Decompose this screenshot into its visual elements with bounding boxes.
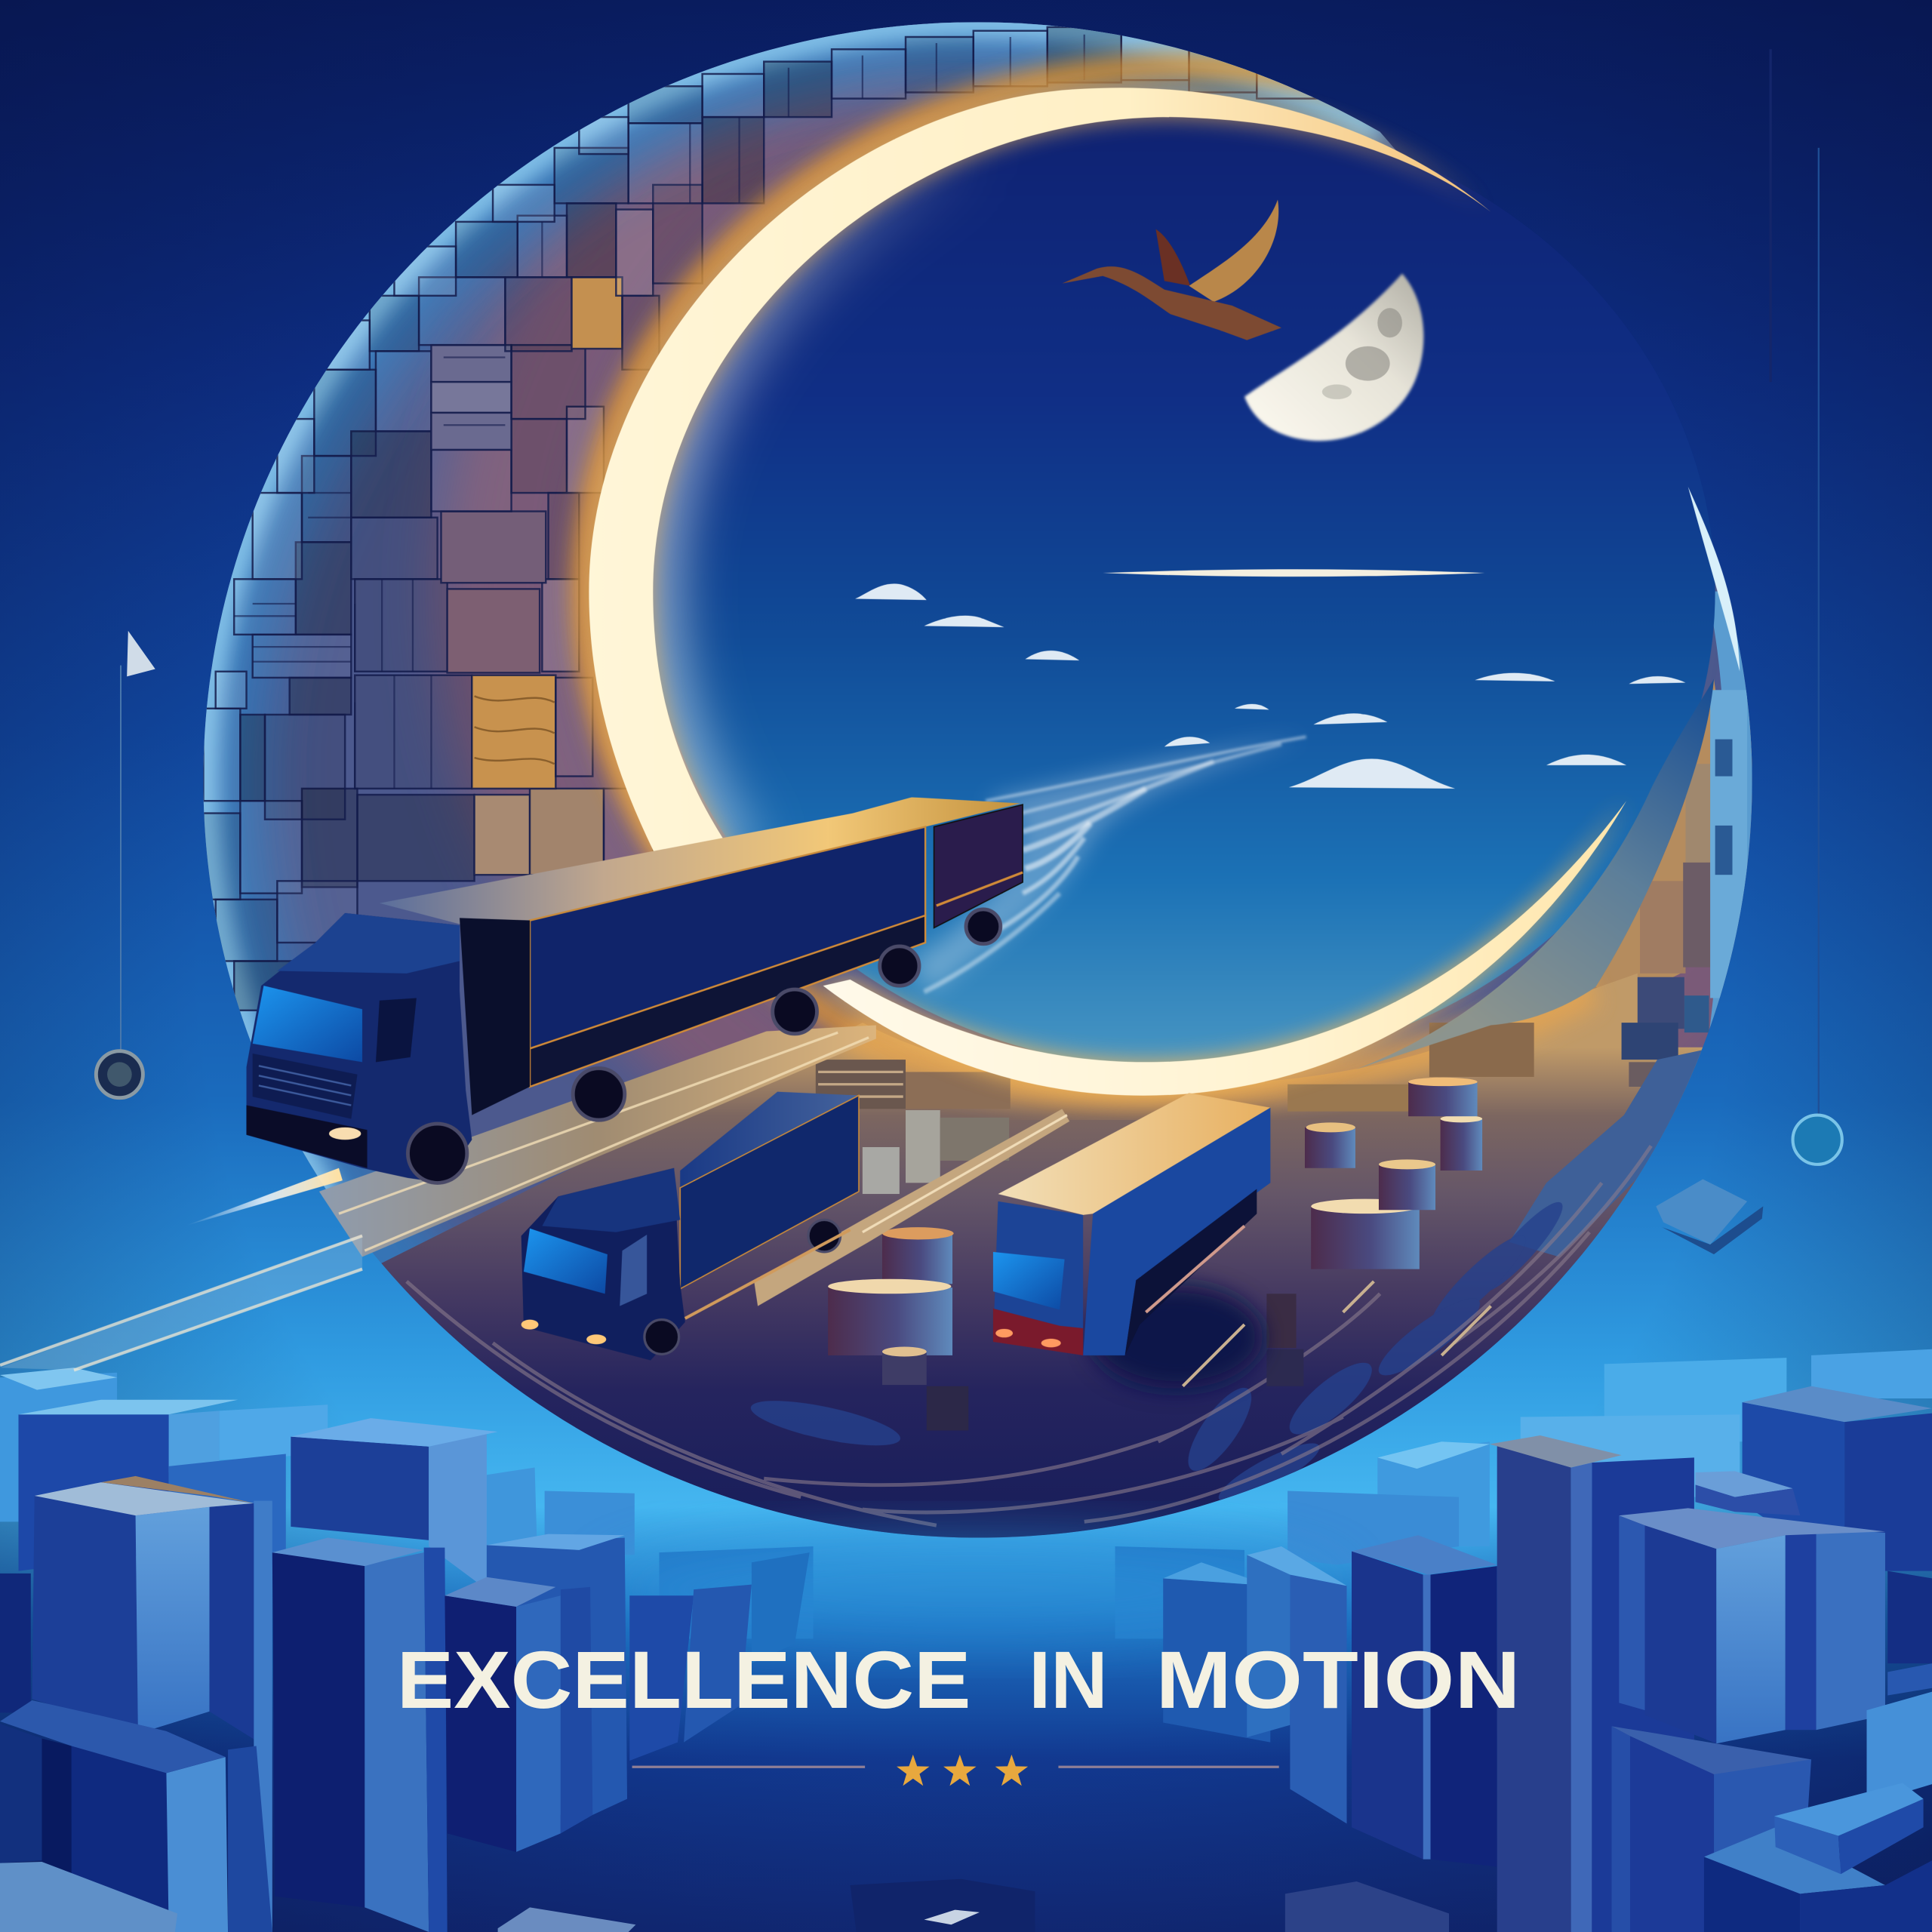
mid box [445, 1595, 516, 1852]
hanging ornament left [96, 631, 155, 1098]
title: IN [1029, 1634, 1108, 1725]
bumper [247, 1105, 368, 1168]
grey haze at lower right of sky [1355, 679, 1714, 1069]
bird [1062, 199, 1281, 340]
stacked parcel wall [203, 27, 1318, 1011]
floor objects at bottom [498, 1879, 1449, 1932]
inner soft glow on crescent [653, 117, 1171, 863]
thin crescent sliver right [1688, 487, 1740, 672]
lead truck [247, 797, 1023, 1183]
moon [1244, 273, 1423, 441]
title: EXCELLENCE [397, 1634, 971, 1725]
cab body [247, 913, 472, 1183]
inner blue rim [204, 23, 1392, 1263]
right tan buildings [1595, 679, 1722, 1001]
grille [253, 1054, 357, 1118]
right rim swirl [1509, 1048, 1715, 1257]
box with tan strap [32, 1496, 138, 1731]
tall box [272, 1552, 365, 1907]
soft white wake behind truck [912, 737, 1306, 992]
pale corner box [0, 1862, 177, 1932]
headlight [329, 1128, 361, 1140]
parcel drums [828, 1078, 1482, 1431]
foreground city haze [604, 1534, 1343, 1645]
crescent glow blur [589, 88, 1491, 863]
title: MOTION [1155, 1634, 1521, 1725]
mauve band near crescent [417, 23, 1752, 1081]
lower crescent glow blur [823, 801, 1626, 1096]
right lower boxes [1612, 1692, 1932, 1932]
title [397, 1634, 1521, 1725]
floating parcel right [1656, 1179, 1763, 1254]
right building blocks [1640, 690, 1747, 998]
right tall stack [1490, 1435, 1694, 1932]
side window [376, 998, 417, 1062]
top crescent arc [589, 88, 1491, 863]
warm light under crescent [851, 986, 1589, 1089]
trailer front dark face [460, 918, 530, 1115]
left front stacks [0, 1476, 592, 1932]
right back stacks [1163, 1386, 1932, 1823]
speed streaks long [0, 1235, 362, 1371]
lower crescent arc [823, 801, 1626, 1096]
road under lead truck [319, 1025, 876, 1257]
cab roof [277, 913, 460, 974]
city and terrain base [308, 974, 1749, 1552]
wood grain on parcel [475, 696, 555, 764]
right mid stack [1352, 1535, 1497, 1866]
blue folds on terrain [747, 1194, 1571, 1511]
road lights [1183, 1281, 1491, 1386]
globe base of stacked parcels [185, 0, 1854, 1552]
divider right [1058, 1766, 1279, 1767]
trailer side [530, 827, 925, 1048]
left back stacks [0, 1400, 810, 1815]
terrain wave strokes [407, 1146, 1651, 1525]
road under second truck [754, 1109, 1069, 1306]
second truck [521, 1092, 859, 1360]
navy parcels by the rim [1622, 977, 1709, 1087]
shadow of third truck [1091, 1285, 1263, 1389]
clouds [855, 583, 1685, 789]
pale outer rim [203, 22, 1380, 1208]
wheels [573, 909, 1001, 1120]
front wheel [408, 1124, 467, 1183]
second trailer [934, 804, 1023, 928]
inner night sky [651, 113, 1715, 1069]
right light blue rim [1706, 592, 1774, 1055]
warehouse buildings behind trucks [816, 1023, 1534, 1194]
warm glow ring [584, 66, 1782, 1116]
slat detail on parcels [234, 35, 1084, 789]
right lit box [1619, 1471, 1885, 1743]
lower left box [0, 1724, 42, 1863]
distant pale parcels [0, 1349, 1932, 1638]
hanging ornament right [1770, 49, 1842, 1164]
windshield [253, 986, 362, 1062]
trailer skirt [530, 915, 925, 1087]
motion streaks behind truck [924, 737, 1306, 992]
divider left [632, 1766, 865, 1767]
speed streak short [185, 1168, 343, 1226]
thin horizon streak [1103, 569, 1484, 577]
third truck [993, 1093, 1270, 1355]
trailer roof [380, 797, 1020, 924]
three gold stars [897, 1755, 1028, 1786]
